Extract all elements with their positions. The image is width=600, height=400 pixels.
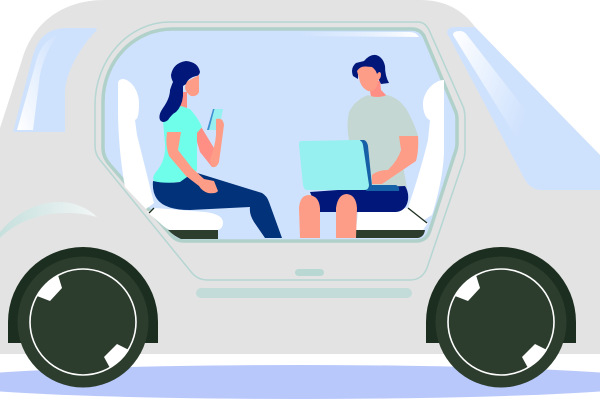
door handle bbox=[295, 269, 324, 276]
woman near arm bbox=[166, 132, 218, 193]
man shirt bbox=[348, 95, 418, 190]
man passenger bbox=[299, 55, 418, 238]
man legs bbox=[299, 194, 357, 238]
front wheel bbox=[426, 247, 576, 388]
front windshield bbox=[447, 27, 600, 190]
woman jeans bbox=[153, 172, 282, 238]
man face bbox=[357, 66, 381, 91]
woman neck bbox=[180, 92, 187, 108]
man hair bbox=[352, 55, 389, 84]
man shorts bbox=[310, 186, 408, 212]
woman hair bbox=[159, 61, 200, 122]
fender highlight bbox=[0, 202, 97, 238]
rear seat bbox=[118, 79, 223, 239]
hub patches bbox=[37, 275, 129, 368]
rear wheel bbox=[8, 247, 158, 388]
front seat bbox=[355, 80, 444, 238]
woman forearm bbox=[210, 119, 224, 167]
phone bbox=[208, 109, 223, 130]
woman passenger bbox=[153, 61, 282, 238]
woman far arm bbox=[195, 125, 217, 167]
hub patches bbox=[455, 275, 547, 368]
man neck bbox=[369, 80, 387, 98]
man arm bbox=[372, 136, 418, 184]
rear side window bbox=[13, 28, 97, 132]
door outline bbox=[95, 22, 465, 280]
door sill bbox=[196, 288, 412, 298]
main window bbox=[103, 29, 457, 241]
wheel arch bbox=[426, 247, 576, 343]
top glass reflection bbox=[300, 32, 419, 37]
wheel arch bbox=[8, 247, 158, 343]
woman shirt bbox=[153, 106, 202, 183]
ground shadow bbox=[0, 365, 600, 399]
laptop bbox=[299, 140, 399, 191]
woman face bbox=[185, 75, 199, 96]
